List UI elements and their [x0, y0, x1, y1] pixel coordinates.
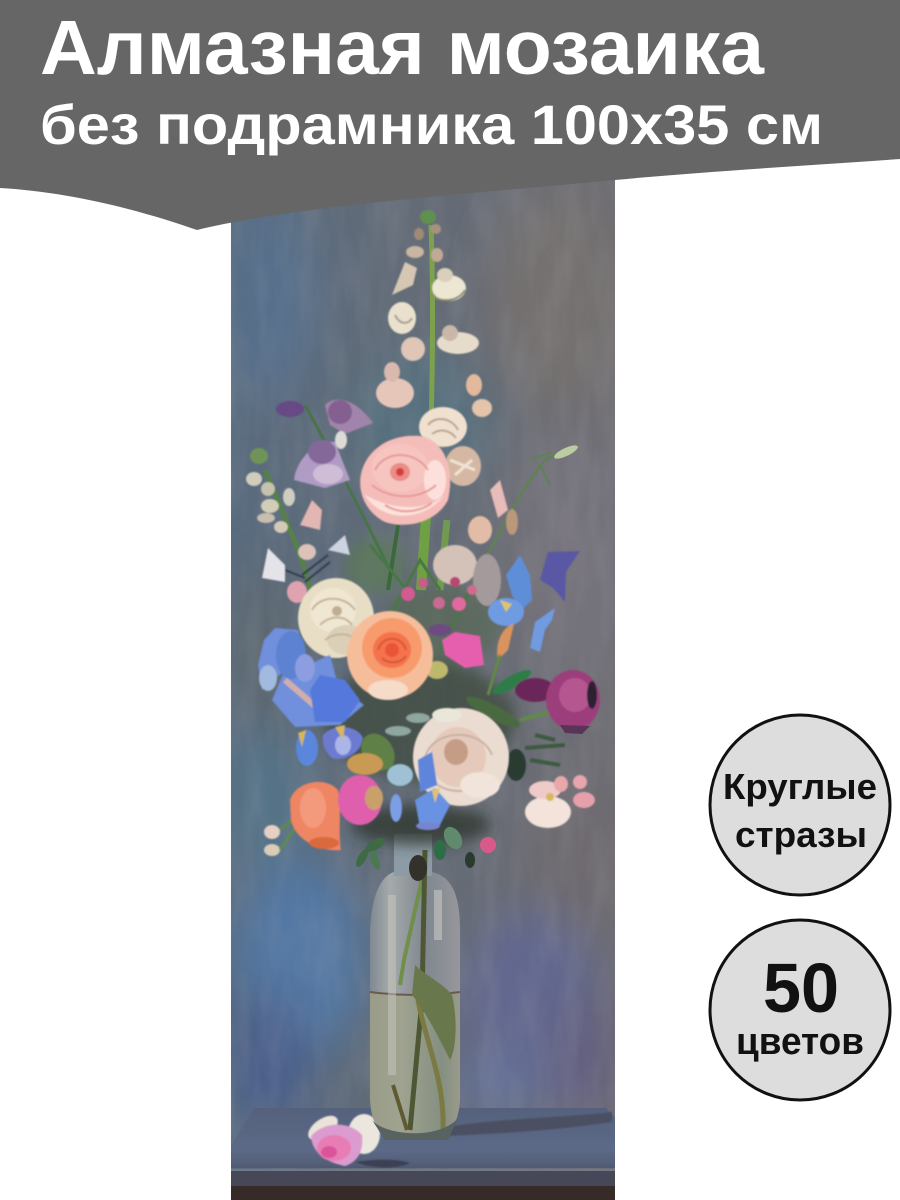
icon: fallen pink rose: [304, 1111, 380, 1166]
right thin stems and blue irises: [433, 443, 580, 695]
dark foliage center: [347, 666, 600, 781]
purple sweet peas: [276, 400, 398, 590]
badge: round rhinestones: [710, 715, 890, 895]
left white flower spike: [246, 448, 350, 603]
glass vase with stems: [370, 834, 460, 1140]
badge: 50 colours: [710, 920, 890, 1100]
pink blossoms right: [525, 775, 595, 828]
coral rose, carnation and center iris: [264, 752, 450, 856]
blue iris left: [258, 628, 364, 766]
upper stock flower spike: [376, 210, 492, 590]
foliage mass behind the bouquet: [325, 537, 515, 845]
table with rose: [231, 1108, 615, 1200]
orange rose: [347, 611, 433, 700]
painted wall background: [225, 170, 630, 1200]
pink peony: [360, 436, 450, 525]
lower leaves at vase neck: [354, 824, 496, 881]
badge: round rhinestones: Круглые: [723, 766, 877, 807]
badge: 50 colours: цветов: [736, 1021, 864, 1063]
subtitle: без подрамника 100х35 см: [40, 93, 823, 156]
icon: blue iris upper right: [488, 551, 580, 695]
cream white peony: [413, 708, 509, 806]
badge: round rhinestones: стразы: [735, 814, 867, 855]
badge: 50 colours: 50: [763, 949, 839, 1027]
plum tulip lower petal: [560, 725, 590, 734]
title: Алмазная мозаика: [40, 5, 765, 91]
panel: painting of a bouquet in a glass vase: [225, 170, 630, 1200]
cream peony: [298, 578, 374, 658]
small pink flowers: [370, 545, 484, 679]
heading banner: [0, 0, 900, 230]
